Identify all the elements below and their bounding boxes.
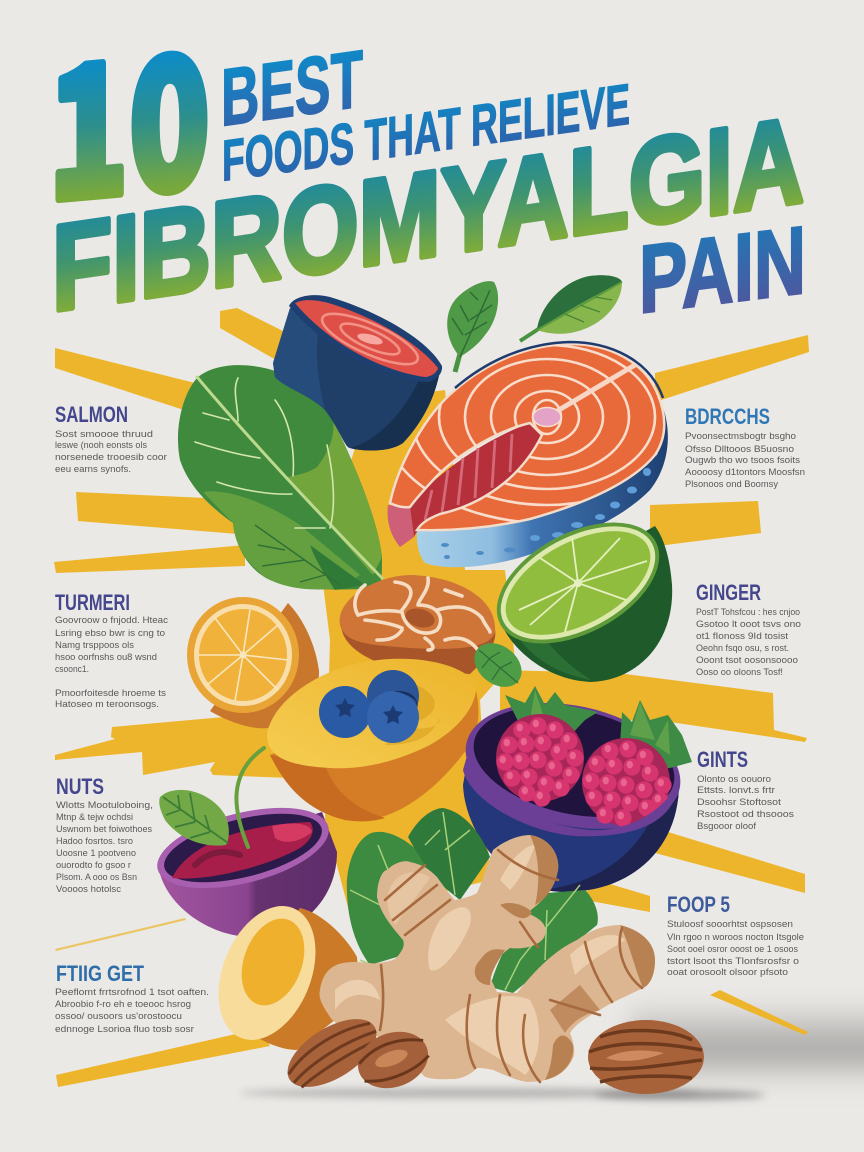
food: raspberry bowl: [454, 685, 692, 892]
panel: salmon: [55, 402, 168, 475]
almond left: [276, 1005, 388, 1101]
heading: gints: GINTS: [697, 747, 748, 772]
heading: ginger: GINGER: [696, 580, 761, 605]
panel: turmeri: [55, 590, 168, 710]
body text: foop 5: Soot ooel osror ooost oe 1 osoos: [667, 944, 798, 955]
food: purple bowl with leaf: [149, 748, 337, 937]
yellow sunburst rays: [54, 308, 809, 1087]
body text: nuts: ouorodto fo gsoo r: [56, 860, 132, 871]
title word best: BEST: [221, 33, 363, 144]
body text: turmeri: hsoo oorfnshs ou8 wsnd: [55, 652, 157, 663]
leaf one: [447, 281, 498, 372]
body text: foop 5: tstort lsoot ths Tlonfsrosfsr o: [667, 956, 799, 967]
body text: gints: Rsostoot od thsooos: [697, 809, 794, 820]
ground shadow: [240, 1000, 864, 1100]
food: orange half: [187, 597, 319, 728]
raspberry leaves: [505, 686, 692, 770]
food: top leaves: [447, 275, 622, 372]
body text: ftiig get: ossoo/ ousoors us'orostoocu: [55, 1011, 182, 1022]
body text: nuts: Wlotts Mootuloboing,: [56, 800, 153, 811]
body text: nuts: Hadoo fosrtos. tsro: [56, 836, 133, 847]
body text: nuts: Uoosne 1 pootveno: [56, 848, 136, 859]
body text: salmon: [55, 429, 168, 475]
title word pain: PAIN: [639, 207, 806, 334]
body text: bdrcchs: Ofsso Dlltooos B5uosno: [685, 444, 794, 455]
body text: salmon: eeu earns synofs.: [55, 464, 131, 475]
heading: turmeri: TURMERI: [55, 590, 130, 615]
body text: salmon: norsenede trooesib coor: [55, 452, 168, 463]
body text: ginger: Gsotoo lt ooot tsvs ono: [696, 619, 801, 630]
body text: gints: Bsgooor oloof: [697, 821, 756, 832]
body text: turmeri: csoonc1.: [55, 664, 89, 675]
heading: nuts: NUTS: [56, 774, 104, 799]
panel: nuts: [56, 774, 153, 895]
body text: nuts: Uswnom bet foiwothoes: [56, 824, 152, 835]
body text: bdrcchs: Plsonoos ond Boomsy: [685, 479, 778, 490]
food: yellow squash: [200, 892, 360, 1054]
panel: bdrcchs: [685, 404, 805, 490]
panel: gints: [697, 747, 794, 832]
heading: foop 5: FOOP 5: [667, 892, 730, 917]
body text: salmon: leswe (nooh eonsts ols: [55, 440, 147, 451]
body text: foop 5: Vln rgoo n woroos nocton Itsgole: [667, 932, 804, 943]
body text: nuts: Plsom. A ooo os Bsn: [56, 872, 137, 883]
food: ginger root: [319, 835, 655, 1082]
body text: turmeri: Hatoseo m teroonsogs.: [55, 699, 159, 710]
food: salmon steak: [388, 340, 668, 568]
body text: turmeri: Lsring ebso bwr is cng to: [55, 628, 165, 639]
body text: ftiig get: [55, 987, 209, 1035]
title: [48, 0, 806, 337]
food: cut navy cylinder with red flesh: [273, 295, 442, 451]
body text: nuts: Mtnp & tejw ochdsi: [56, 812, 133, 823]
heading: salmon: SALMON: [55, 402, 128, 427]
food: lime half: [477, 498, 679, 682]
body text: foop 5: Stuloosf sooorhtst ospsosen: [667, 919, 793, 930]
body text: ftiig get: Abroobio f-ro eh e toeooc hsrog: [55, 999, 191, 1010]
leaf two: [520, 275, 622, 341]
body text: ginger: [696, 607, 801, 678]
body text: ginger: Ooso oo oloons Tosf!: [696, 667, 783, 678]
blueberries: [319, 670, 419, 743]
food: almonds: [276, 1005, 704, 1101]
body text: turmeri: Pmoorfoitesde hroeme ts: [55, 688, 166, 699]
title line foods that relieve: FOODS THAT RELIEVE: [222, 72, 630, 194]
almond middle: [350, 1022, 436, 1098]
body text: turmeri: [55, 615, 168, 710]
body text: bdrcchs: [685, 431, 805, 490]
food: mango bowl with blueberries: [267, 659, 478, 821]
body text: ftiig get: Peeflomt frrtsrofnod 1 tsot oaften.: [55, 987, 209, 998]
panel: ftiig get: [55, 961, 209, 1035]
body text: gints: Dsoohsr Stoftosot: [697, 797, 781, 808]
heading: ftiig get: FTIIG GET: [56, 961, 144, 986]
body text: gints: Ettsts. lonvt.s frtr: [697, 785, 776, 796]
body text: salmon: Sost smoooe thruud: [55, 429, 153, 440]
body text: ginger: PostT Tohsfcou : hes cnjoo: [696, 607, 800, 618]
body text: nuts: Voooos hotolsc: [56, 884, 121, 895]
body text: gints: [697, 774, 794, 832]
food: big spinach leaf: [178, 365, 382, 590]
body text: nuts: [56, 800, 153, 895]
body text: foop 5: [667, 919, 804, 978]
body text: ginger: ot1 fIonoss 9Id tosist: [696, 631, 788, 642]
body text: bdrcchs: Aoooosy d1tontors Moosfsn: [685, 467, 805, 478]
food: small leaf: [466, 634, 530, 696]
food: walnut slice: [340, 575, 495, 674]
almond right: [588, 1020, 704, 1094]
raspberries: [496, 714, 672, 827]
body text: ginger: Ooont tsot oosonsoooo: [696, 655, 798, 666]
body text: ginger: Oeohn fsqo osu, s rost.: [696, 643, 789, 654]
body text: bdrcchs: Ougwb tho wo tsoos fsoits: [685, 455, 800, 466]
body text: bdrcchs: Pvoonsectmsbogtr bsgho: [685, 431, 796, 442]
panel: ginger: [696, 580, 801, 678]
food: spinach behind ginger: [347, 808, 598, 993]
body text: foop 5: ooat orosoolt olsoor pfsoto: [667, 967, 788, 978]
heading: bdrcchs: BDRCCHS: [685, 404, 770, 429]
body text: gints: Olonto os oouoro: [697, 774, 771, 785]
body text: turmeri: Namg trsppoos ols: [55, 640, 134, 651]
body text: ftiig get: ednnoge Lsorioa fluo tosb sosr: [55, 1024, 195, 1035]
panel: foop 5: [667, 892, 804, 978]
body text: turmeri: Goovroow o fnjodd. Hteac: [55, 615, 168, 626]
